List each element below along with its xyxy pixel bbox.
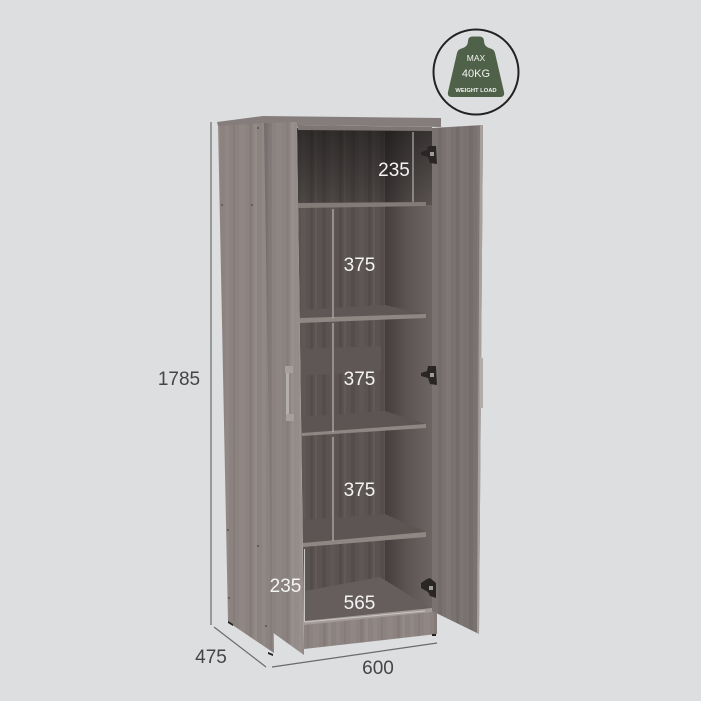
foot left [268,652,273,656]
cabinet [217,116,483,656]
hinge: top [421,146,437,164]
weight icon [448,36,504,97]
interior dimension labels: 235 [378,160,410,181]
interior measurement lines [304,132,425,622]
interior dimension labels: 375 [344,480,375,501]
handle [285,366,294,421]
side panel [218,122,274,653]
weight badge: WEIGHT LOAD [455,88,497,94]
hinge: middle [421,366,437,385]
foot right [432,634,436,636]
outer dimension labels: 475 [195,647,227,668]
outer dimension labels: 600 [362,658,394,679]
interior dimension labels: 565 [344,593,375,614]
weight badge [434,30,518,114]
outer dimension labels [158,369,394,679]
shelf 1 [298,202,426,208]
shelf 2 [300,305,426,323]
base plinth [304,611,437,649]
weight badge: 40KG [462,68,490,80]
top compartment shadow [297,127,432,205]
outer dimension labels: 1785 [158,369,200,390]
interior dimension labels [270,160,410,614]
interior back wall [297,127,432,628]
interior dimension labels: 375 [344,255,375,276]
shelf 3 [302,411,426,436]
weight badge: MAX [467,53,486,63]
open right door [432,125,483,634]
interior right wall [385,127,432,612]
front-left door [264,122,304,655]
foot rear [228,621,233,626]
drawer recess [301,346,381,376]
outer dimension lines [211,122,437,667]
shelf 4 [303,514,426,547]
interior dimension labels: 375 [344,369,375,390]
hinge: bottom [421,578,436,598]
side dots [221,127,267,627]
cabinet floor [304,577,430,622]
top panel [217,116,441,127]
interior dimension labels: 235 [270,576,301,597]
